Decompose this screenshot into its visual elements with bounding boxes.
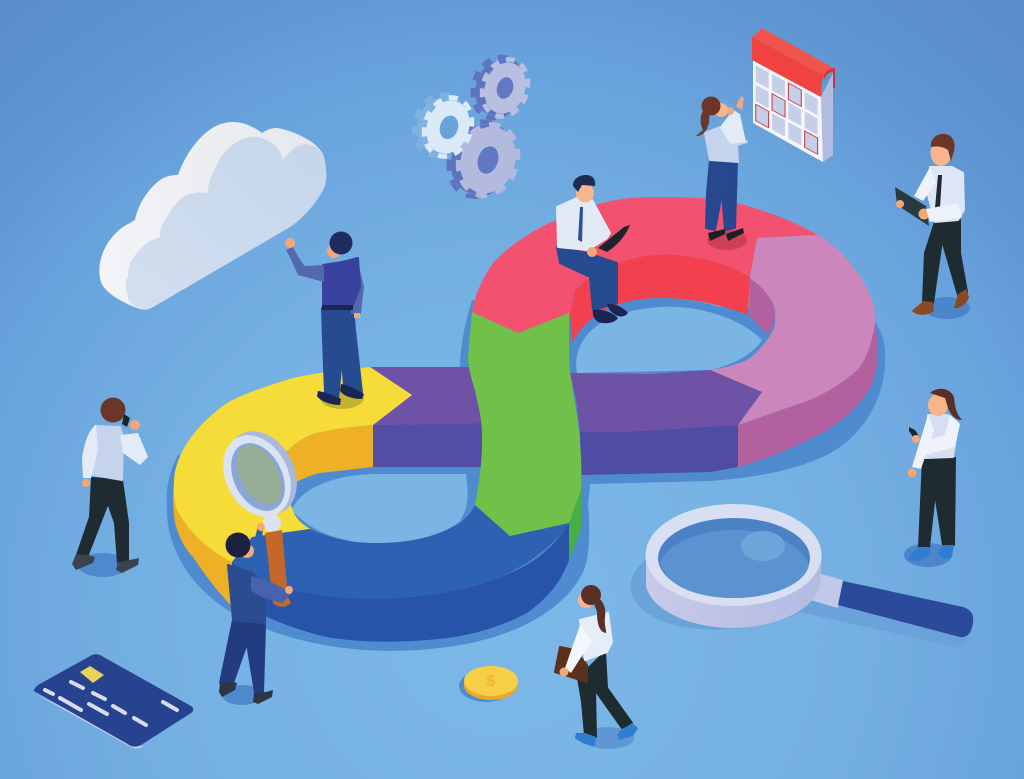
person: man holding magnifying glass	[210, 419, 310, 705]
purple segment left	[370, 367, 482, 467]
person: man on phone left	[72, 398, 148, 577]
green segment	[468, 312, 581, 560]
blue segment	[232, 505, 569, 642]
person: man pointing at cloud	[285, 232, 364, 409]
gear top	[465, 51, 535, 126]
icon: credit card	[34, 654, 193, 748]
gear bottom	[439, 114, 527, 207]
red segment	[472, 197, 818, 342]
left hole	[286, 467, 476, 544]
purple segment right	[570, 370, 762, 475]
icon: coin	[459, 666, 518, 702]
icon: large magnifying glass	[631, 504, 973, 648]
person: woman with bag walking	[555, 585, 638, 749]
person: woman with ponytail facing calendar	[696, 96, 747, 250]
person: woman with phone right	[904, 389, 962, 567]
icon: coin: $	[487, 673, 496, 690]
person: man sitting with laptop	[557, 175, 630, 323]
infinity loop	[167, 197, 885, 651]
loop ground shadow	[167, 300, 885, 651]
gear white	[407, 88, 479, 165]
icon: calendar	[752, 28, 835, 162]
pink segment	[710, 235, 878, 467]
small magnifying glass	[210, 419, 310, 607]
icon: gears	[407, 51, 535, 207]
person: man with tablet	[895, 134, 970, 319]
icon: cloud	[99, 122, 326, 310]
yellow segment	[173, 367, 412, 607]
right hole	[572, 298, 770, 376]
calendar grid	[756, 65, 818, 154]
